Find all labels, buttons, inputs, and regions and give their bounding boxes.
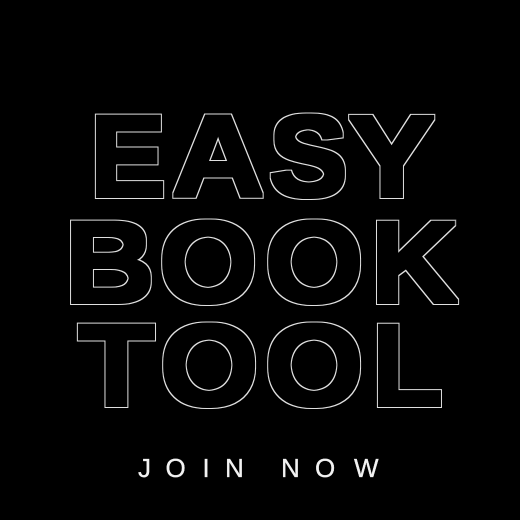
heading line: EASY: E	[90, 93, 166, 221]
heading line: EASY: S	[269, 92, 348, 221]
heading line: EASY: Y	[349, 91, 435, 220]
heading line: EASY	[90, 91, 435, 221]
title: outlined headline	[65, 91, 457, 430]
heading line: BOOK: O	[265, 198, 363, 327]
heading line: TOOL: O	[265, 301, 363, 430]
heading line: TOOL: O	[160, 301, 258, 430]
heading line: BOOK: K	[371, 198, 457, 327]
heading line: BOOK: O	[159, 198, 257, 327]
heading line: TOOL	[78, 301, 443, 430]
heading line: TOOL: L	[372, 302, 443, 430]
heading line: EASY: A	[172, 92, 264, 221]
heading line: TOOL: T	[78, 302, 154, 430]
call to action: JOIN NOW: JOIN NOW	[138, 453, 379, 483]
heading line: BOOK: B	[65, 199, 154, 327]
heading line: BOOK	[65, 198, 457, 327]
